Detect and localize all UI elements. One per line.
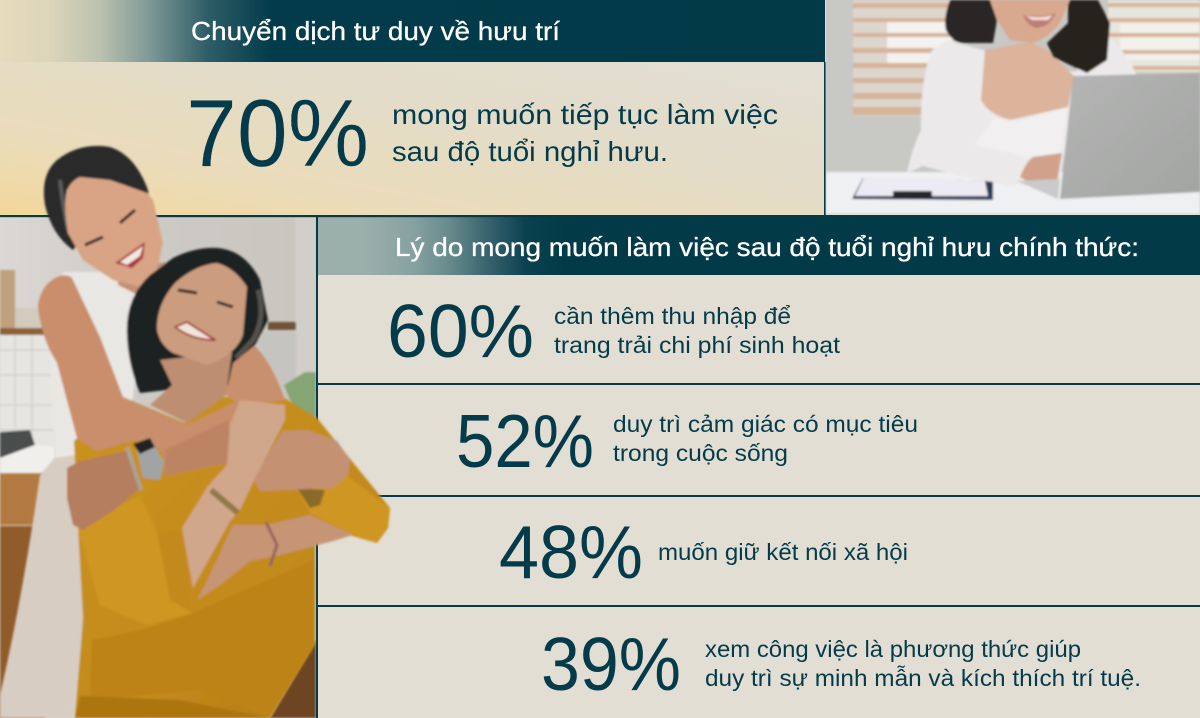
hand on sleeve	[253, 430, 350, 491]
photo: mother and daughter embracing	[0, 146, 390, 718]
photo: mother and daughter background kitchen	[0, 217, 316, 718]
statistic row: 52%: 52%	[456, 399, 594, 483]
hair	[945, 0, 997, 43]
statistic: 70%: mong muốn tiếp tục làm việc	[392, 99, 778, 130]
older woman smile	[175, 322, 215, 340]
statistic row: 60%: trang trải chi phí sinh hoạt	[554, 332, 841, 358]
dress shading	[90, 560, 315, 718]
daughter other shoulder	[226, 343, 285, 405]
older woman lower arm	[197, 515, 353, 600]
statistic row: 39%: xem công việc là phương thức giúp	[705, 636, 1081, 662]
older woman hair	[127, 248, 268, 393]
white top	[51, 272, 143, 458]
left hand	[67, 451, 140, 530]
clipboard	[852, 178, 993, 200]
statistic: 70%	[186, 80, 778, 187]
heading bar: retirement mindset shift	[0, 0, 825, 62]
photo: woman working on laptop	[826, 0, 1200, 214]
statistic row: 39%: 39%	[541, 622, 681, 706]
statistic row: 48%: 48%	[499, 510, 643, 594]
skirt	[0, 455, 84, 718]
face	[990, 0, 1070, 43]
sweater	[907, 37, 1136, 186]
right sleeve	[297, 470, 390, 543]
panel: reasons list background	[318, 275, 1200, 718]
statistic: 70%: 70%	[186, 80, 369, 187]
statistic row: 39%: duy trì sự minh mẫn và kích thích trí tuệ.	[705, 665, 1141, 691]
bracelets	[127, 447, 141, 490]
watch	[136, 441, 164, 480]
statistic row: 60%	[387, 289, 841, 373]
neck and chest	[981, 42, 1074, 120]
daughter arm around shoulder	[38, 275, 240, 476]
statistic row: 52%: duy trì cảm giác có mục tiêu	[613, 411, 918, 437]
statistic row: 39%	[541, 622, 1141, 706]
dress main	[74, 397, 390, 718]
statistic row: 60%: cần thêm thu nhập để	[554, 303, 791, 329]
statistic row: 52%: trong cuộc sống	[613, 440, 788, 466]
daughter neck	[118, 262, 168, 300]
daughter hair	[44, 146, 150, 250]
statistic row: 52%	[456, 399, 918, 483]
statistic row: 60%: 60%	[387, 289, 534, 373]
heading bar: retirement mindset shift: Chuyển dịch tư duy về hưu trí	[191, 16, 561, 46]
statistic row: 48%: muốn giữ kết nối xã hội	[658, 539, 908, 565]
hand	[1020, 153, 1062, 183]
panel: top statistic background	[0, 62, 826, 215]
older woman face	[157, 263, 247, 365]
daughter smile	[115, 242, 145, 268]
daughter face	[65, 177, 163, 287]
heading bar: reasons to keep working	[318, 217, 1200, 275]
statistic: 70%: sau độ tuổi nghỉ hưu.	[392, 136, 668, 167]
heading bar: reasons to keep working: Lý do mong muốn làm việc sau độ tuổi nghỉ hưu chính thức:	[395, 232, 1139, 262]
left sleeve	[78, 495, 193, 625]
statistic row: 48%	[499, 510, 908, 594]
older woman eyes	[178, 290, 233, 307]
older woman raised forearm	[182, 400, 285, 588]
daughter eyes	[85, 210, 135, 245]
laptop	[1060, 73, 1200, 199]
older woman neck	[150, 352, 232, 423]
